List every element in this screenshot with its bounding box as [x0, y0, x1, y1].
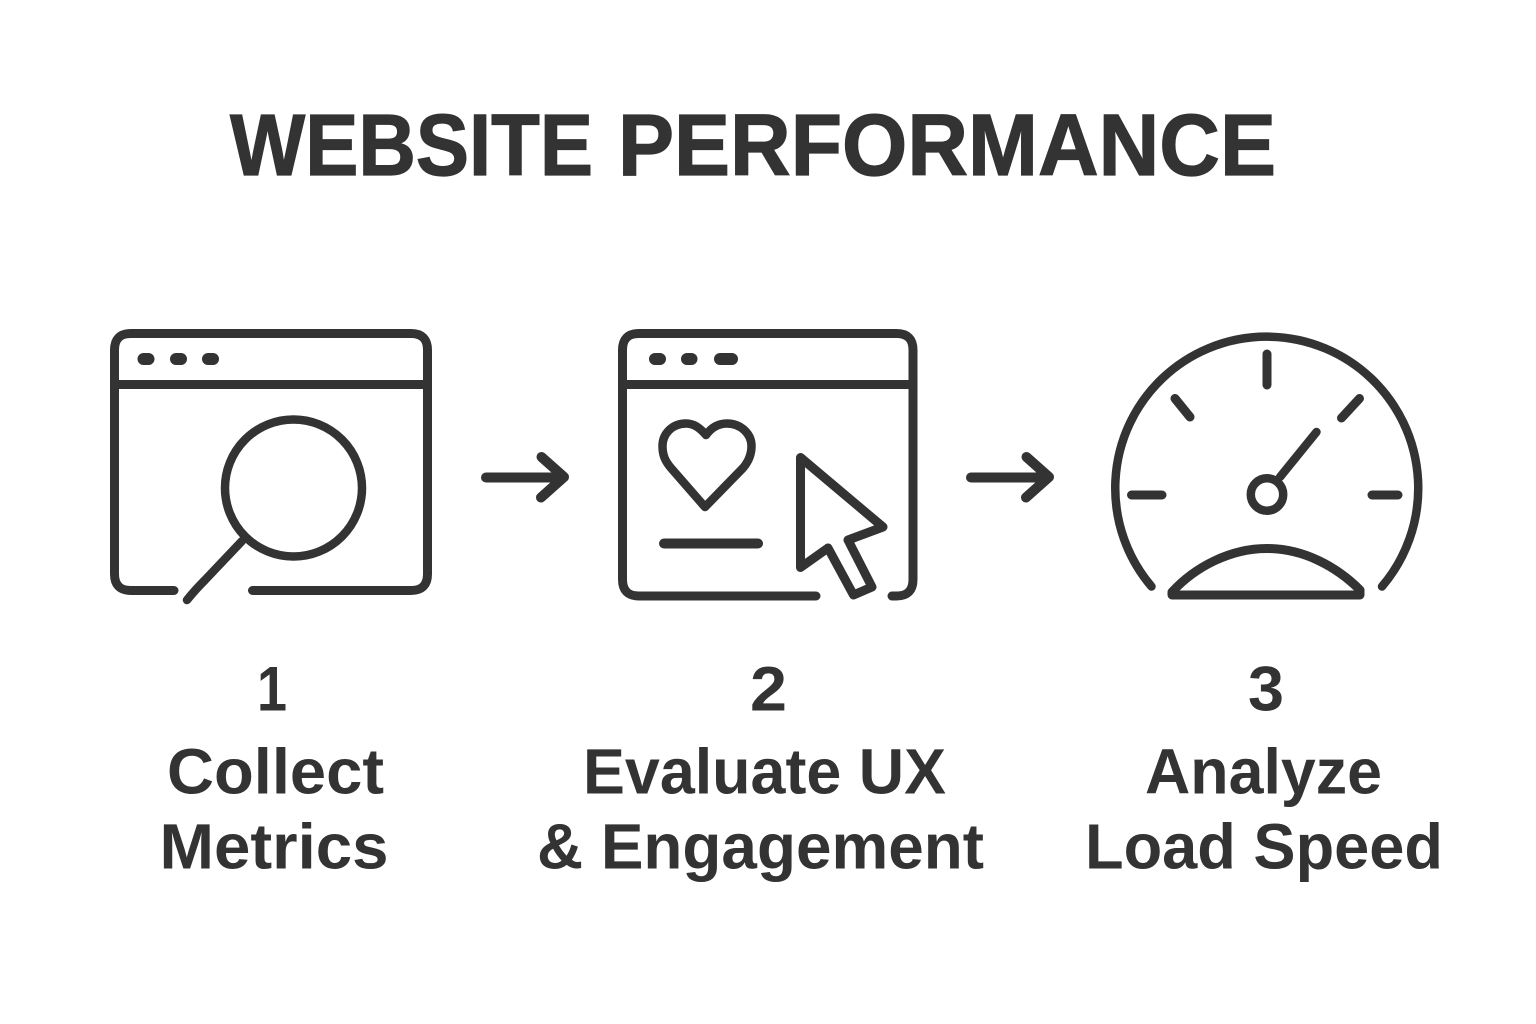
magnifying handle [187, 541, 242, 600]
text line [664, 538, 758, 548]
icon: browser with heart and cursor [622, 334, 913, 596]
title bar divider [622, 380, 913, 389]
step 1 label: Metrics [160, 810, 388, 882]
heart [662, 424, 752, 507]
window dots [144, 353, 213, 365]
needle hub [1251, 478, 1283, 511]
arrow: step 1 to step 2 [486, 457, 564, 498]
needle [1280, 432, 1316, 477]
step 1 label [160, 654, 388, 882]
cursor arrow [800, 458, 883, 595]
title [230, 97, 1276, 194]
dome [1172, 548, 1360, 595]
arrow: step 2 to step 3 [971, 457, 1049, 498]
title: WEBSITE [230, 97, 593, 194]
icon: speedometer gauge [1115, 337, 1418, 595]
window dots [655, 353, 732, 365]
tick marks [1132, 354, 1398, 495]
browser window frame [622, 334, 913, 596]
step number: 2 [750, 654, 787, 724]
step name: Evaluate UX [583, 735, 946, 807]
icon: browser with magnifying glass [114, 334, 428, 600]
step 3 label [1085, 654, 1443, 882]
step name: Collect [167, 735, 384, 807]
step name: Analyze [1145, 735, 1382, 807]
step number: 3 [1248, 654, 1284, 724]
title: PERFORMANCE [618, 97, 1276, 194]
step 3 label: Load Speed [1085, 810, 1443, 882]
magnifying lens [225, 420, 362, 556]
browser window frame [114, 334, 428, 590]
step 2 label [537, 654, 984, 882]
step number: 1 [257, 654, 287, 724]
step 2 label: & Engagement [537, 810, 984, 882]
gauge arc [1115, 337, 1418, 586]
title bar divider [114, 380, 428, 389]
